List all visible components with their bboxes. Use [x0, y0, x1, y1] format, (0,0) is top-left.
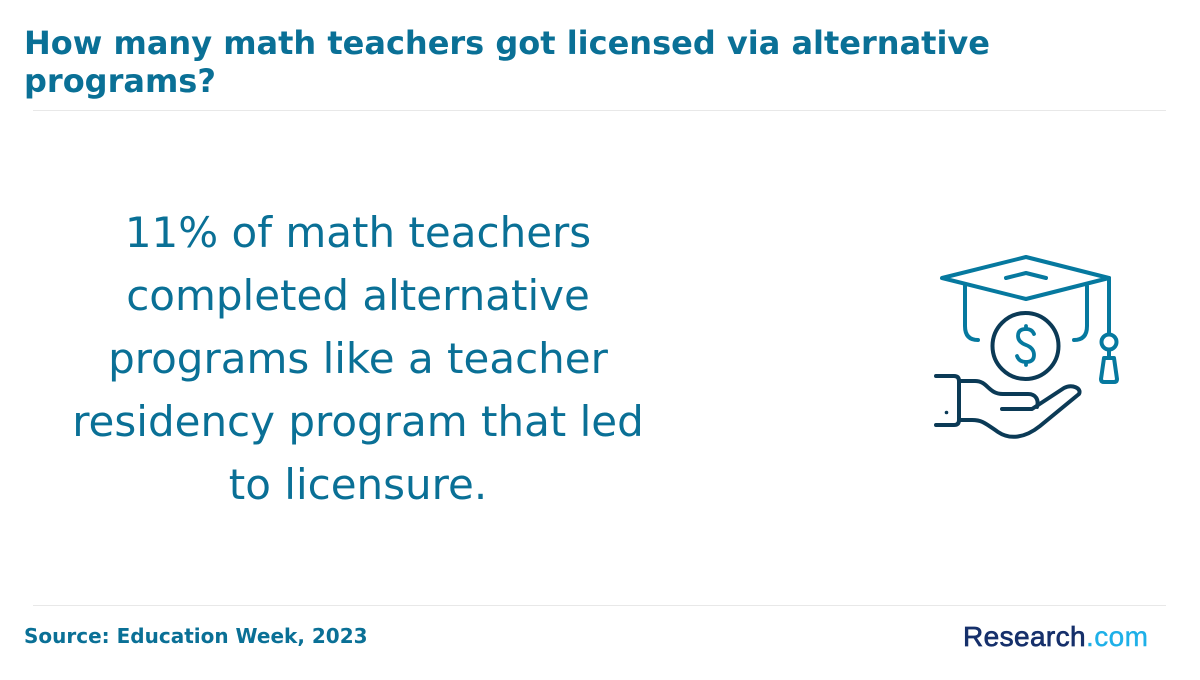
main statement text: completed alternative: [126, 271, 590, 320]
title: programs?: [24, 62, 216, 100]
main statement text: residency program that led: [72, 397, 644, 446]
icon: cuff button: [945, 411, 948, 414]
main statement text: 11% of math teachers: [125, 208, 591, 257]
icon: graduation cap, coin and hand: [934, 255, 1119, 439]
source text: Source: Education Week, 2023: [24, 624, 368, 648]
main statement text: programs like a teacher: [108, 334, 608, 383]
icon: graduation cap: [942, 257, 1117, 382]
logo: Research.com: Research.com: [963, 621, 1148, 652]
icon: open hand: [936, 376, 1080, 437]
main statement text: to licensure.: [229, 460, 487, 509]
main statement text: [72, 208, 644, 509]
title: [24, 24, 990, 100]
title: How many math teachers got licensed via alternative: [24, 24, 990, 62]
icon: coin with dollar sign: [992, 313, 1058, 379]
